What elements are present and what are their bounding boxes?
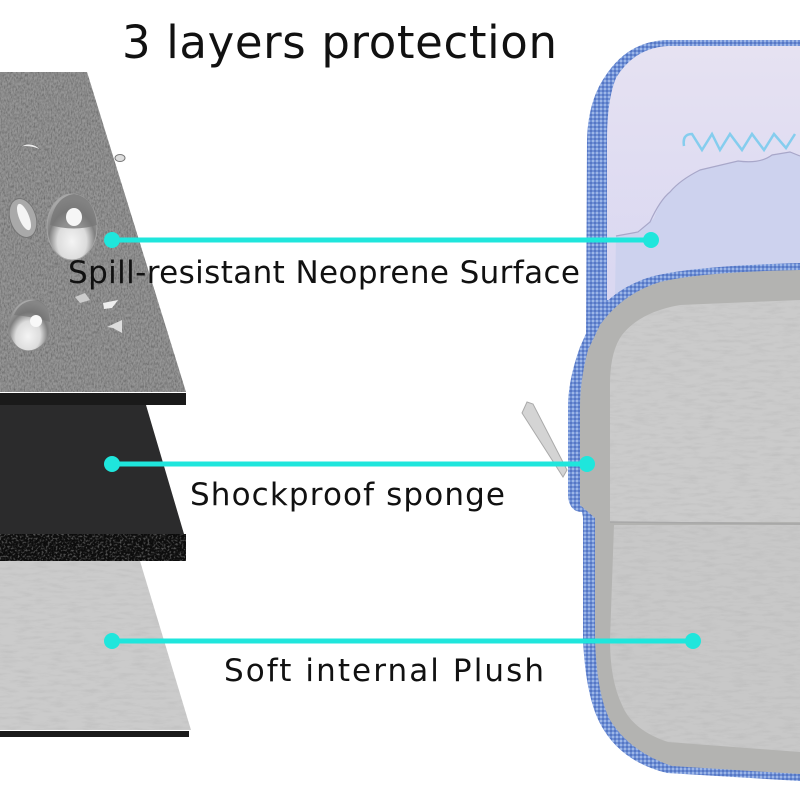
panel: material layers xyxy=(0,72,191,737)
lower compartment xyxy=(568,263,800,781)
layer: neoprene surface xyxy=(0,72,186,405)
callout: sponge xyxy=(104,456,595,513)
connector: neoprene xyxy=(104,232,659,248)
layer: soft plush xyxy=(0,561,191,737)
label: sponge: Shockproof sponge xyxy=(190,477,505,513)
callout: plush xyxy=(104,633,701,689)
printed logo xyxy=(684,134,795,150)
lower plush pocket xyxy=(610,525,800,752)
connector: sponge xyxy=(104,456,595,472)
callout: neoprene surface xyxy=(68,232,659,291)
zipper pull xyxy=(522,402,567,477)
layer: shockproof sponge xyxy=(0,405,186,561)
label: plush: Soft internal Plush xyxy=(224,653,544,689)
label: neoprene: Spill-resistant Neoprene Surface xyxy=(68,255,580,291)
water droplets xyxy=(4,144,125,354)
sleeve upper surface xyxy=(586,40,800,340)
connector: plush xyxy=(104,633,701,649)
title: 3 layers protection xyxy=(122,16,557,69)
upper plush pocket xyxy=(610,300,800,522)
printed flower xyxy=(615,152,800,296)
panel: sleeve product photo xyxy=(522,40,800,781)
